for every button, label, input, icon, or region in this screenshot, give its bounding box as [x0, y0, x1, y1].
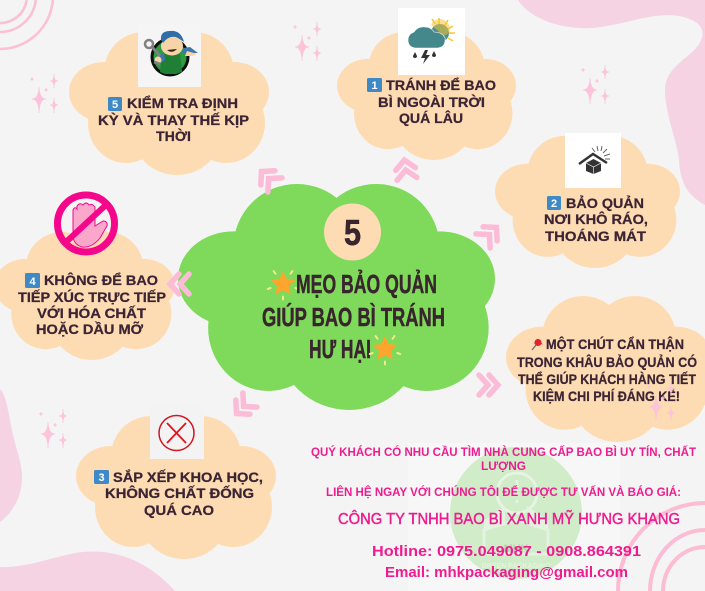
icon: sun left [268, 271, 298, 300]
panel: tip 5 [69, 25, 269, 175]
label: 3 [98, 472, 105, 484]
label: THỂ GIÚP KHÁCH HÀNG TIẾT [518, 372, 697, 387]
label [367, 78, 496, 126]
panel: closing note [506, 296, 705, 442]
panel: tip 3 [76, 406, 276, 559]
decoration: concentric arcs bottom right [618, 503, 705, 591]
logo watermark: GREEN PACKAGING [481, 563, 551, 570]
number badge: 5 [344, 212, 361, 253]
contact block: LIÊN HỆ NGAY VỚI CHÚNG TÔI ĐỂ ĐƯỢC TƯ VẤN VÀ BÁO GIÁ: [326, 486, 681, 499]
arrow: to note [479, 375, 498, 395]
label [18, 273, 166, 337]
logo watermark [408, 443, 620, 591]
icon: weather [398, 8, 465, 75]
label: 4 [29, 276, 36, 288]
contact block: Hotline: 0975.049087 - 0908.864391 [372, 543, 641, 560]
arrow: to tip 1 [394, 159, 417, 180]
panel: tip 4 [0, 195, 175, 360]
sparkles: upper right [581, 65, 609, 104]
title [262, 269, 445, 364]
label: KHÔNG ĐỂ BAO [44, 273, 158, 288]
blob: left [0, 389, 22, 522]
icon: box under roof [565, 133, 621, 188]
panel: tip 1 [337, 8, 516, 160]
label: BÌ NGOÀI TRỜI [378, 95, 485, 110]
label: QUÁ CAO [144, 503, 214, 518]
label: KHÔNG CHẤT ĐỐNG [105, 486, 254, 501]
icon: sun right [370, 336, 400, 364]
label: SẮP XẾP KHOA HỌC, [113, 470, 263, 485]
arrow: to tip 5 [254, 164, 282, 192]
icon: no touching [58, 195, 114, 252]
panel: central title cloud [178, 184, 495, 410]
label [98, 96, 249, 144]
contact block: LƯỢNG [481, 461, 526, 473]
label [544, 196, 648, 244]
label: TRÁNH ĐỂ BAO [386, 78, 496, 93]
title: MẸO BẢO QUẢN [296, 269, 437, 299]
number badge [324, 204, 381, 260]
label: THỜI [156, 129, 191, 144]
sparkles: on note [647, 382, 675, 421]
label: NƠI KHÔ RÁO, [544, 212, 648, 227]
title: HƯ HẠI [309, 334, 371, 364]
label: THOÁNG MÁT [545, 229, 647, 244]
label: 2 [551, 198, 557, 210]
contact block: CÔNG TY TNHH BAO BÌ XANH MỸ HƯNG KHANG [338, 511, 680, 528]
logo watermark: MHK [503, 543, 529, 555]
sparkles: upper left [30, 74, 58, 113]
arrow: to tip 4 [170, 274, 189, 294]
label: KỲ VÀ THAY THẾ KỊP [98, 113, 249, 128]
sparkles: lower left [39, 409, 67, 448]
panel: tip 2 [495, 133, 680, 268]
label [94, 470, 263, 518]
sparkles: top center [293, 22, 321, 61]
label: KIỂM TRA ĐỊNH [127, 96, 238, 111]
icon: red cross [150, 406, 204, 459]
label: TIẾP XÚC TRỰC TIẾP [18, 290, 166, 305]
icon: pushpin [532, 338, 543, 350]
blob: bottom left [0, 551, 175, 591]
label: VỚI HÓA CHẤT [37, 306, 147, 321]
label: BẢO QUẢN [566, 196, 644, 211]
contact block [311, 446, 696, 581]
arrow: to tip 2 [476, 220, 504, 248]
decoration: concentric arcs top left [0, 0, 53, 49]
label [517, 337, 697, 404]
blob: top right [518, 0, 705, 205]
label: MỘT CHÚT CẨN THẬN [546, 337, 684, 352]
title: GIÚP BAO BÌ TRÁNH [262, 302, 445, 332]
arrow: to tip 3 [229, 393, 257, 421]
label: KIỆM CHI PHÍ ĐÁNG KỂ! [533, 389, 680, 404]
contact block: Email: mhkpackaging@gmail.com [385, 564, 628, 581]
contact block: QUÝ KHÁCH CÓ NHU CẦU TÌM NHÀ CUNG CẤP BAO BÌ UY TÍN, CHẤT [311, 446, 696, 459]
label: QUÁ LÂU [399, 111, 463, 126]
label: 1 [371, 80, 378, 92]
label: TRONG KHÂU BẢO QUẢN CÓ [517, 355, 697, 370]
label: HOẶC DẦU MỠ [36, 322, 144, 337]
icon: mechanic [138, 25, 201, 87]
label: 5 [112, 99, 118, 111]
